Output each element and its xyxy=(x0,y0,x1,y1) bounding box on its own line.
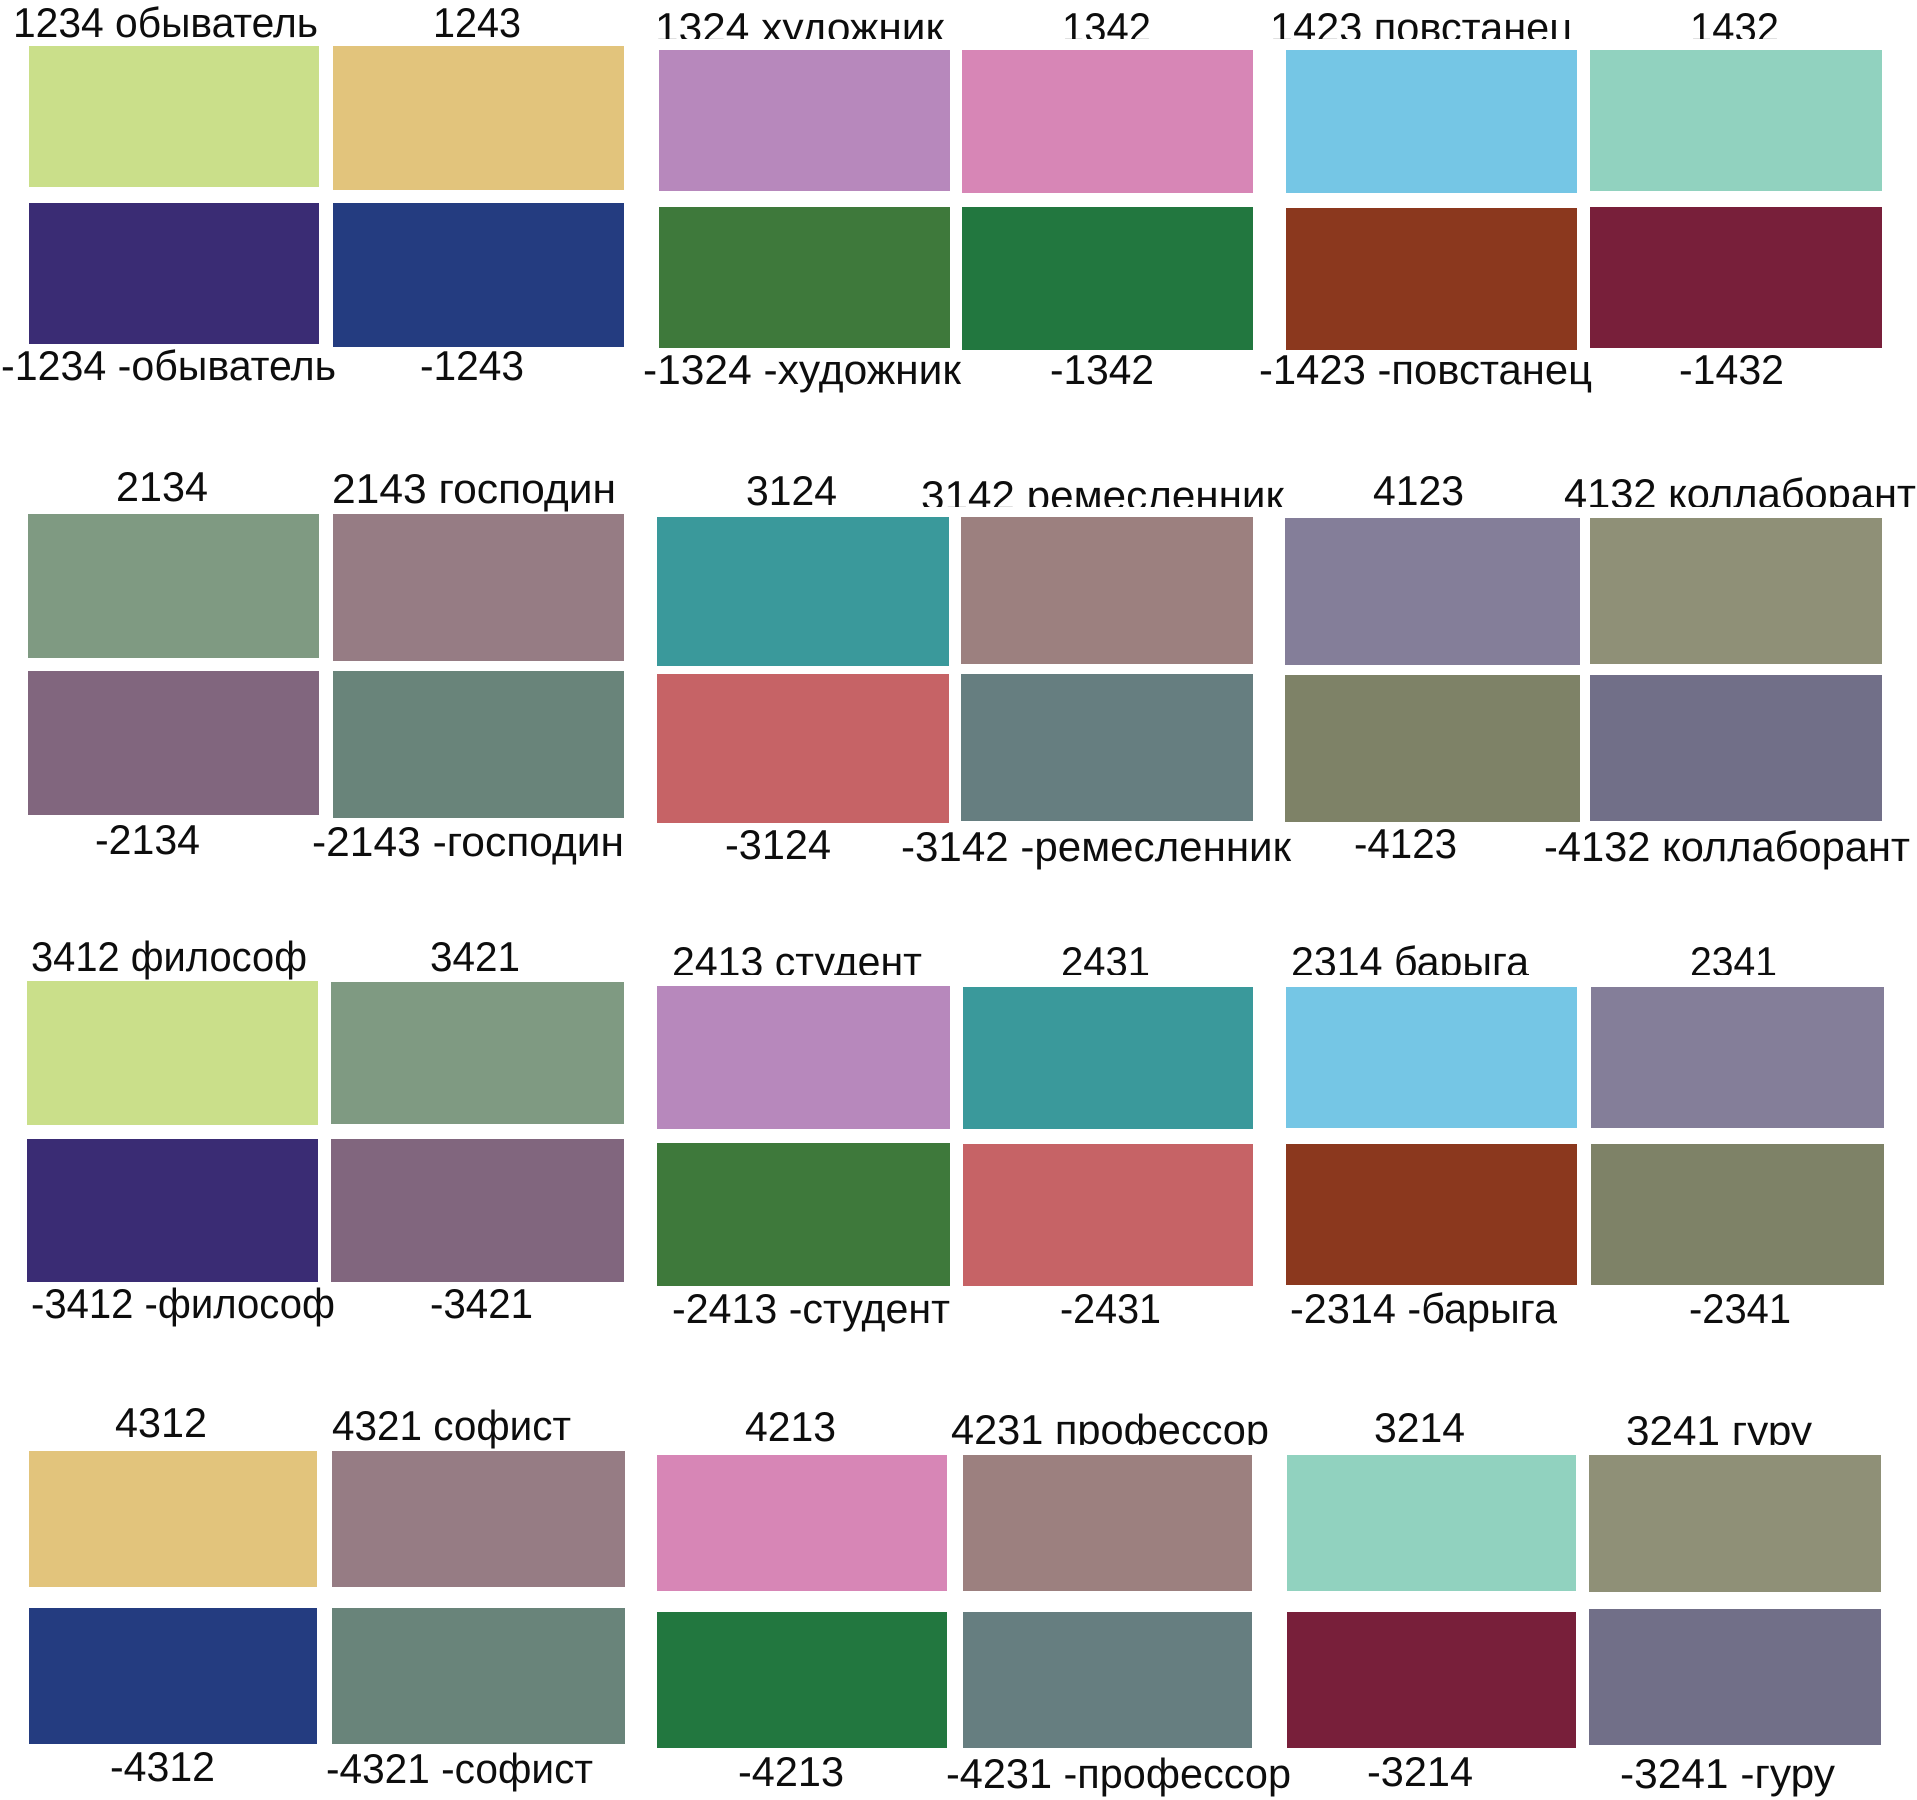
swatch: 3412 xyxy=(27,981,318,1125)
label: 1234: 1234 обыватель xyxy=(13,0,318,46)
panel: 1342 xyxy=(962,4,1253,393)
label: 2341: 2341 xyxy=(1690,938,1777,985)
label: -1342: -1342 xyxy=(1050,346,1154,393)
swatch: -4123 xyxy=(1285,675,1580,822)
label: 3142: 3142 ремесленник xyxy=(921,472,1285,519)
swatch: -1234 xyxy=(29,203,319,344)
swatch: 1423 xyxy=(1286,50,1577,193)
label: 2134: 2134 xyxy=(116,463,208,510)
swatch: 4321 xyxy=(332,1451,625,1587)
label: 1243: 1243 xyxy=(433,0,521,46)
swatch: -4132 xyxy=(1590,675,1882,821)
label: 1423: 1423 повстанец xyxy=(1270,4,1573,51)
swatch: 2431 xyxy=(963,987,1253,1129)
swatch: -1243 xyxy=(333,203,624,347)
swatch: -1342 xyxy=(962,207,1253,350)
panel: 1324 xyxy=(643,4,962,393)
label: 3241: 3241 гуру xyxy=(1626,1407,1812,1454)
panel: 3124 xyxy=(657,467,949,868)
swatch: -2431 xyxy=(963,1144,1253,1286)
panel: 3421 xyxy=(331,933,624,1327)
panel: 1243 xyxy=(333,0,624,389)
swatch: -3214 xyxy=(1287,1612,1576,1748)
panel: 2143 xyxy=(312,465,624,865)
swatch: 1324 xyxy=(659,50,950,191)
panel: 4231 xyxy=(946,1406,1291,1797)
label: -4321: -4321 -софист xyxy=(326,1745,593,1792)
label: -2431: -2431 xyxy=(1060,1285,1161,1332)
label: 4123: 4123 xyxy=(1373,467,1464,514)
label: -3412: -3412 -философ xyxy=(31,1280,335,1327)
label: -3214: -3214 xyxy=(1367,1748,1473,1795)
swatch: -4312 xyxy=(29,1608,317,1744)
panel: 4312 xyxy=(29,1399,317,1790)
swatch: -3412 xyxy=(27,1139,318,1282)
swatch: -2341 xyxy=(1591,1144,1884,1285)
label: 2413: 2413 студент xyxy=(672,938,922,985)
label: 3421: 3421 xyxy=(430,933,520,980)
swatch: 3214 xyxy=(1287,1455,1576,1591)
label: 2143: 2143 господин xyxy=(332,465,616,512)
swatch: 4312 xyxy=(29,1451,317,1587)
swatch: 3142 xyxy=(961,517,1253,664)
swatch: -4231 xyxy=(963,1612,1252,1748)
panel: 2314 xyxy=(1286,938,1577,1332)
swatch: -1432 xyxy=(1590,207,1882,348)
swatch: -1324 xyxy=(659,207,950,348)
label: 4213: 4213 xyxy=(745,1403,836,1450)
panel: 4321 xyxy=(326,1402,625,1792)
swatch: 4213 xyxy=(657,1455,947,1591)
swatch: -4213 xyxy=(657,1612,947,1748)
label: -2314: -2314 -барыга xyxy=(1290,1285,1558,1332)
panel: 4123 xyxy=(1285,467,1580,867)
panel: 1423 xyxy=(1259,4,1592,393)
label: -3241: -3241 -гуру xyxy=(1620,1750,1835,1797)
label: 3412: 3412 философ xyxy=(31,933,307,980)
swatch: 2413 xyxy=(657,986,950,1129)
swatch: 4231 xyxy=(963,1455,1252,1591)
swatch: 2341 xyxy=(1591,987,1884,1128)
swatch: 1243 xyxy=(333,46,624,190)
panel: 3142 xyxy=(901,472,1292,870)
swatch: 3421 xyxy=(331,982,624,1124)
label: -1243: -1243 xyxy=(420,342,524,389)
label: -2134: -2134 xyxy=(95,816,200,863)
panel: 2134 xyxy=(28,463,319,863)
label: -2341: -2341 xyxy=(1689,1285,1791,1332)
label: -4123: -4123 xyxy=(1354,820,1457,867)
label: 3214: 3214 xyxy=(1374,1404,1465,1451)
label: -3142: -3142 -ремесленник xyxy=(901,823,1292,870)
panel: 2431 xyxy=(963,938,1253,1332)
label: 3124: 3124 xyxy=(746,467,837,514)
swatch: 2314 xyxy=(1286,987,1577,1128)
panel: 4132 xyxy=(1544,470,1916,870)
swatch: 2134 xyxy=(28,514,319,658)
label: 1342: 1342 xyxy=(1062,4,1151,51)
swatch: 3241 xyxy=(1589,1455,1881,1592)
label: -2413: -2413 -студент xyxy=(672,1285,950,1332)
label: -1324: -1324 -художник xyxy=(643,346,962,393)
panel: 3214 xyxy=(1287,1404,1576,1795)
label: -2143: -2143 -господин xyxy=(312,818,624,865)
swatch: -2134 xyxy=(28,671,319,815)
label: 2314: 2314 барыга xyxy=(1291,938,1530,985)
panel: 1432 xyxy=(1590,4,1882,393)
label: -1423: -1423 -повстанец xyxy=(1259,346,1592,393)
label: 4132: 4132 коллаборант xyxy=(1564,470,1916,517)
swatch: -3124 xyxy=(657,674,949,823)
swatch: -2143 xyxy=(333,671,624,818)
panel: 2413 xyxy=(657,938,950,1332)
swatch: 1432 xyxy=(1590,50,1882,191)
label: -4312: -4312 xyxy=(110,1743,215,1790)
label: -1234: -1234 -обыватель xyxy=(1,342,336,389)
swatch: -4321 xyxy=(332,1608,625,1744)
swatch: 1342 xyxy=(962,50,1253,193)
swatch: 1234 xyxy=(29,46,319,187)
swatch: -3241 xyxy=(1589,1609,1881,1745)
label: 2431: 2431 xyxy=(1061,938,1150,985)
panel: 3412 xyxy=(27,933,335,1327)
swatch: -2413 xyxy=(657,1143,950,1286)
label: -3421: -3421 xyxy=(430,1280,533,1327)
swatch: -3421 xyxy=(331,1139,624,1282)
label: -4231: -4231 -профессор xyxy=(946,1750,1291,1797)
panel: 2341 xyxy=(1591,938,1884,1332)
label: 1432: 1432 xyxy=(1690,4,1779,51)
label: 4231: 4231 профессор xyxy=(951,1406,1269,1453)
label: -1432: -1432 xyxy=(1679,346,1784,393)
swatch: -1423 xyxy=(1286,208,1577,350)
label: 1324: 1324 художник xyxy=(655,4,945,51)
swatch: 4132 xyxy=(1590,518,1882,664)
swatch: -3142 xyxy=(961,674,1253,821)
swatch: 3124 xyxy=(657,517,949,666)
swatch: 4123 xyxy=(1285,518,1580,665)
panel: 3241 xyxy=(1589,1407,1881,1797)
panel: 1234 xyxy=(1,0,336,389)
label: -3124: -3124 xyxy=(725,821,831,868)
label: -4213: -4213 xyxy=(738,1748,844,1795)
panel: 4213 xyxy=(657,1403,947,1795)
swatch: 2143 xyxy=(333,514,624,661)
label: 4312: 4312 xyxy=(115,1399,207,1446)
swatch: -2314 xyxy=(1286,1144,1577,1285)
label: 4321: 4321 софист xyxy=(332,1402,571,1449)
label: -4132: -4132 коллаборант xyxy=(1544,823,1910,870)
